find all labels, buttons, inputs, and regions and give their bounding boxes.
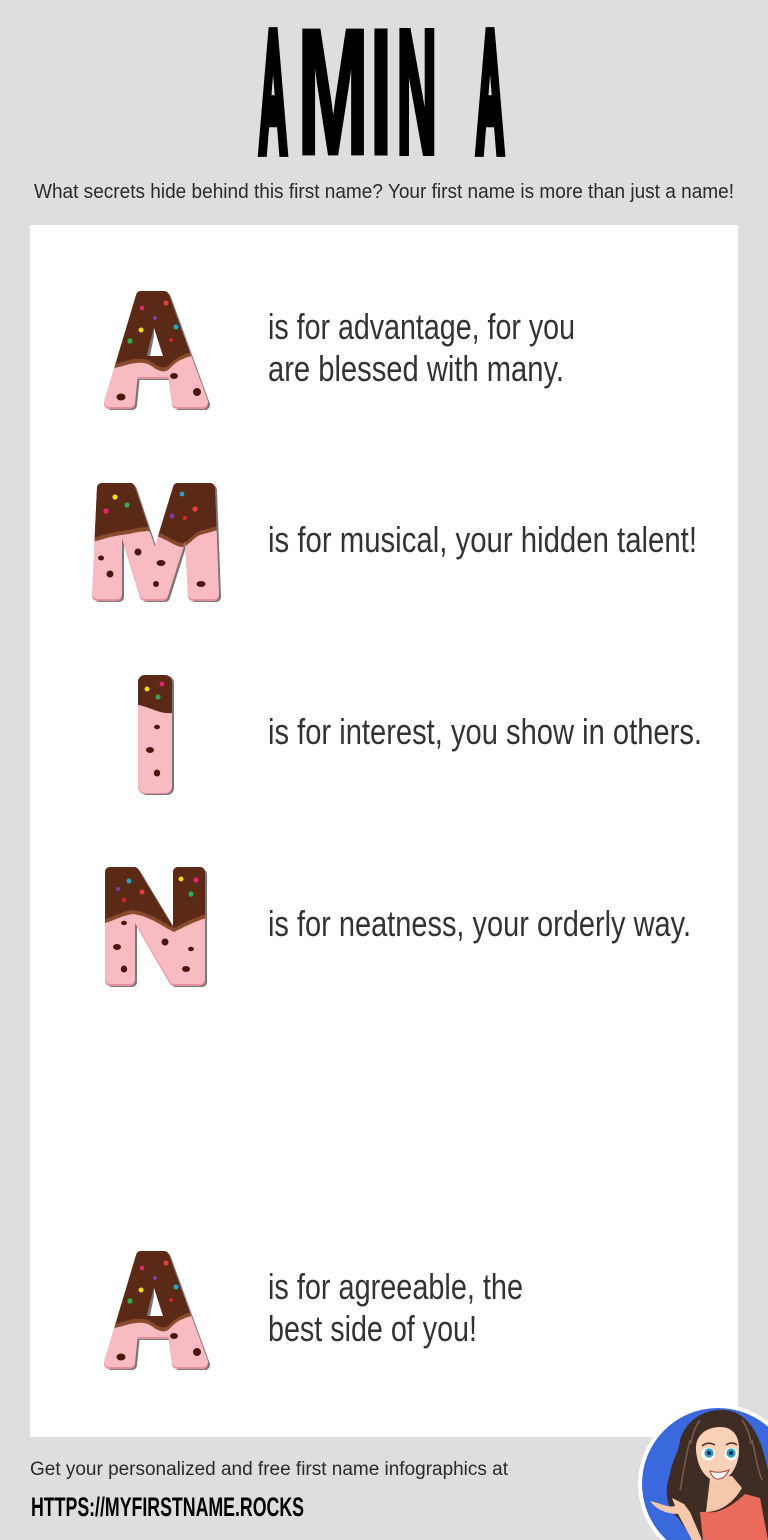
text: second letter A line [268, 1266, 523, 1349]
icon: chocolate letter A [109, 296, 205, 405]
icon: chocolate letter I [138, 675, 174, 795]
title [259, 0, 504, 192]
icon: chocolate letter A (second) [109, 1256, 205, 1365]
text: letter A line [268, 306, 575, 389]
icon: chocolate letter N [110, 872, 202, 982]
title: A [476, 0, 504, 186]
text: second letter A line: best side of you! [268, 1308, 477, 1349]
title: A [259, 0, 287, 186]
panel: letters [30, 225, 738, 1437]
text: letter A line: are blessed with many. [268, 348, 564, 389]
icon: chocolate letter M [97, 488, 216, 597]
subtitle: What secrets hide behind this first name? Your first name is more than just a name! [34, 181, 734, 203]
footer url: HTTPS://MYFIRSTNAME.ROCKS [31, 1492, 304, 1522]
text: letter A line: is for advantage, for you [268, 306, 575, 347]
footer text: Get your personalized and free first name infographics at [30, 1459, 509, 1480]
icon: avatar [638, 1404, 768, 1540]
text: second letter A line: is for agreeable, the [268, 1266, 523, 1307]
title: N [397, 0, 437, 190]
